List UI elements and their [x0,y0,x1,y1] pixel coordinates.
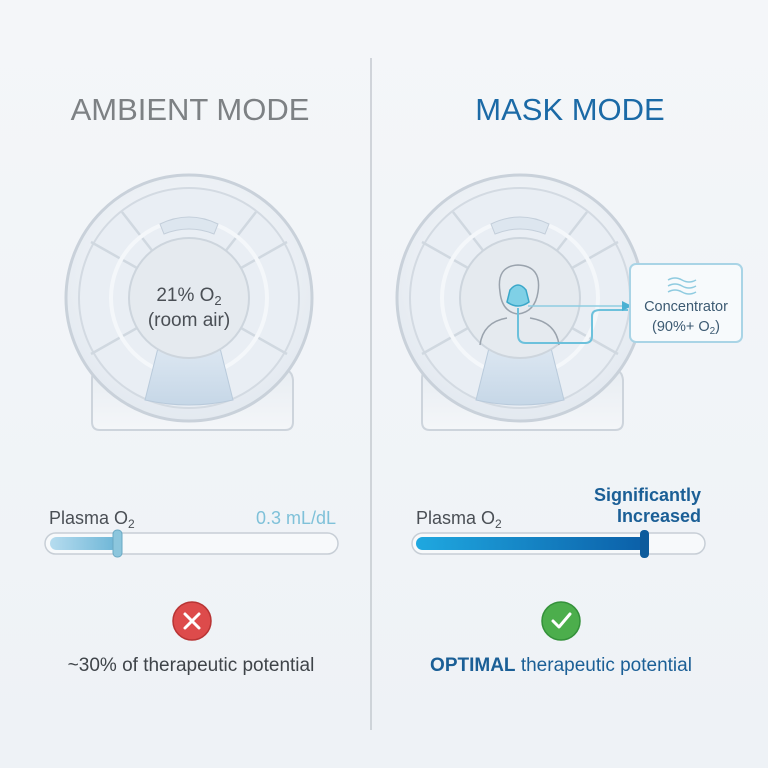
callout: concentrator: 2 [710,326,716,337]
icon: person with mask [480,265,559,345]
text: 21% O2 room air: 2 [214,293,222,308]
text: ambient result: ~30% of therapeutic potential [68,655,314,676]
callout: concentrator: ) [715,319,720,335]
callout: concentrator: (90%+ O [652,319,710,335]
bar: mask plasma: Plasma O [416,508,495,528]
bar: mask plasma: Significantly [594,485,701,505]
divider [370,58,372,730]
bar: ambient plasma [45,508,338,557]
title: mask mode: MASK MODE [475,92,665,127]
bar: mask plasma: 2 [495,517,502,531]
callout: concentrator [630,264,742,342]
chamber: ambient: (room air) [148,310,230,331]
text: mask result: OPTIMAL therapeutic potential [430,655,692,676]
icon: green check [542,602,580,640]
icon: red x [173,602,211,640]
bar: ambient plasma: Plasma O [49,508,128,528]
bar: mask plasma [412,485,705,558]
title: ambient mode: AMBIENT MODE [71,92,309,127]
chamber: ambient [66,175,312,430]
bar: mask plasma: Increased [617,506,701,526]
bar: ambient plasma: 2 [128,517,135,531]
chamber: mask [397,175,643,430]
callout: concentrator: Concentrator [644,299,728,315]
text: 21% O2 room air: 21% O [156,285,214,306]
bar: ambient plasma: 0.3 mL/dL [256,508,336,528]
